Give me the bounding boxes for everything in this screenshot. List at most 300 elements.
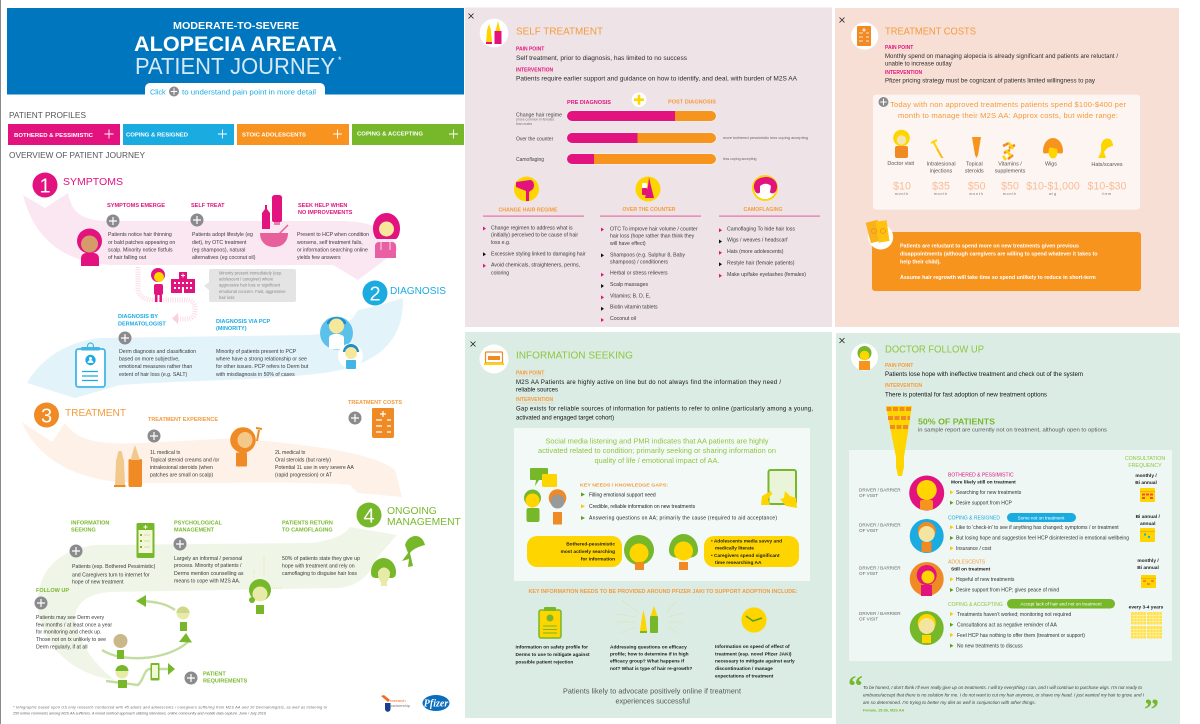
- stage 2 diagnosis: DIAGNOSIS: [390, 285, 446, 297]
- panel: information seeking: Derms to use to mitigate against: [516, 652, 590, 658]
- panel: monthly costs: [873, 95, 1140, 210]
- callout: adolescents media savvy: • Caregivers spend significant: [711, 553, 780, 559]
- column: change hair regime: Excessive styling linked to damaging hair: [491, 251, 586, 257]
- stage 1 symptoms: 1: [39, 176, 51, 198]
- icon: hospital: [171, 272, 195, 293]
- panel: monthly costs: Wigs: [1045, 162, 1057, 168]
- stage 1 symptoms: (eg shampoos), natural: [192, 248, 245, 254]
- panel: treatment costs: INTERVENTION: [885, 70, 923, 76]
- panel: social media listening: Answering questions on AA; primarily the cause (required to aid acceptance): [589, 516, 777, 522]
- stage 1 symptoms: SELF TREAT: [191, 203, 225, 209]
- panel: information seeking: necessary to mitigate against early: [715, 659, 795, 665]
- row: coping and resigned: DRIVER / BARRIER: [859, 522, 901, 528]
- row: bothered and pessimistic: DRIVER / BARRIER: [859, 488, 901, 492]
- icon: clipboard: [76, 343, 105, 387]
- column: over the counter: OTC To improve hair volume / counter: [610, 226, 698, 232]
- stage 1 symptoms: worsens, self treatment fails,: [297, 240, 363, 246]
- stage 2 diagnosis: [27, 280, 446, 398]
- stage 4 ongoing management: TO CAMOFLAGING: [282, 528, 333, 534]
- bar chart: pre and post diagnosis: Camoflaging: [516, 157, 544, 163]
- icon: speed clock: [741, 607, 767, 633]
- stage 4 ongoing management: means to cope with M2S AA.: [174, 579, 240, 585]
- stage 1 symptoms: or bald patches appearing on: [108, 240, 175, 246]
- row: bothered and pessimistic: BOTHERED & PESSIMISTIC: [948, 472, 1014, 478]
- callout: adolescents media savvy: medically literate: [715, 546, 754, 552]
- callout: adolescents media savvy: • Adolescents media savvy and: [711, 538, 782, 544]
- stage 3 treatment: 1L medical tx: [150, 450, 181, 456]
- panel: treatment costs: Pfizer pricing strategy must be cognizant of patients limited willingness to pay: [885, 79, 1095, 85]
- quote: am so determined. I’m trying to better my diet as well in conjunction with other things.: [863, 700, 1036, 705]
- icon: headscarf: [402, 536, 425, 567]
- icon: head with patch and syringe: [230, 427, 262, 466]
- panel: social media listening: Credible, reliable information on new treatments: [589, 504, 696, 510]
- icon: phone: [136, 523, 154, 558]
- stage 1 symptoms: SYMPTOMS EMERGE: [107, 203, 165, 209]
- stage 4 ongoing management: Derms mention counselling as: [174, 571, 244, 577]
- stage 3 treatment: (rapid progression) or AT: [275, 473, 333, 479]
- header banner: PATIENT JOURNEY: [135, 53, 335, 79]
- icon: doctor: [373, 213, 400, 258]
- callout: adolescents media savvy: time researching AA: [715, 560, 762, 566]
- stage 2 diagnosis: extent of hair loss (e.g. SALT): [119, 372, 188, 378]
- patient profile buttons: STOIC ADOLESCENTS: [242, 132, 306, 138]
- stage 3 treatment: Topical steroid creams and /or: [150, 458, 219, 464]
- stage 2 diagnosis: for other issues. PCP refers to Derm but: [216, 364, 309, 370]
- icon: woman with hair loss: [77, 228, 102, 266]
- callout: bothered-pessimistic: for information: [581, 556, 615, 562]
- stage 3 treatment: Oral steroids (but rarely): [275, 458, 331, 464]
- panel: monthly costs: month: [895, 192, 909, 196]
- callout: reluctance to spend: disappointments (although caregivers are willing to spend whatever it takes to: [900, 251, 1098, 257]
- stage 4 ongoing management: Patients (esp. Bothered Pessimistic): [72, 564, 156, 570]
- panel: monthly costs: month: [1003, 192, 1017, 196]
- stage 1 symptoms: SEEK HELP WHEN: [298, 203, 347, 209]
- panel: doctor follow up: PAIN POINT: [885, 363, 913, 369]
- stage 3 treatment: [22, 400, 402, 497]
- column: camoflaging: [719, 175, 820, 278]
- icon: girl: [151, 268, 165, 302]
- icon: tube and bottle: [486, 21, 502, 44]
- row: coping and resigned: [859, 513, 1160, 553]
- column: change hair regime: [483, 176, 586, 276]
- panel: self treatment: Patients require earlier support and guidance on how to identify, and deal, with burden of M2S AA: [516, 76, 797, 82]
- panel: treatment costs: [835, 8, 1179, 327]
- stage 4 ongoing management: hope with treatment and rely on: [282, 564, 355, 570]
- panel: information seeking: expectations of treatment: [715, 673, 774, 679]
- row: coping and accepting: every 3-4 years: [1129, 604, 1164, 610]
- panel: treatment costs: PAIN POINT: [885, 45, 913, 51]
- icon: small phone: [150, 663, 160, 680]
- column: camoflaging: Hats (more adolescents): [727, 249, 784, 255]
- row: coping and accepting: DRIVER / BARRIER: [859, 611, 901, 616]
- column: over the counter: [600, 176, 701, 322]
- panel: social media listening: [514, 428, 810, 581]
- icon: bottles and bowl: [260, 195, 288, 247]
- row: adolescents: DRIVER / BARRIER: [859, 566, 901, 570]
- row: coping and accepting: Accept lack of hair and not on treatment: [1020, 602, 1102, 606]
- stage 4 ongoing management: SEEKING: [71, 528, 96, 534]
- stage 2 diagnosis: DIAGNOSIS BY: [118, 314, 158, 320]
- bar chart: pre and post diagnosis: less coping accepting: [723, 157, 757, 161]
- panel: information seeking: efficacy group? What happens if: [610, 659, 684, 665]
- icon: hat: [1098, 138, 1113, 158]
- row: coping and resigned: Some not on treatment: [1018, 515, 1065, 520]
- stage 1 symptoms: diet), try OTC treatment: [192, 240, 247, 246]
- panel: monthly costs: Today with non approved treatments patients spend $100-$400 per: [890, 100, 1126, 109]
- cycle arrows: [102, 595, 192, 685]
- callout: minority present immediately: emotional concern. Fast, aggressive: [219, 289, 286, 294]
- callout: minority present immediately: adolescent / caregiver) where: [219, 276, 274, 282]
- icon: cost sheet: [857, 26, 871, 46]
- heading: patient profiles: PATIENT PROFILES: [9, 111, 86, 120]
- panel: social media listening: quality of life / emotional impact of AA.: [595, 456, 719, 465]
- panel: monthly costs: month to manage their M2S AA: Approx costs, but wide range:: [898, 111, 1118, 120]
- stage 2 diagnosis: DERMATOLOGIST: [118, 322, 166, 328]
- panel: monthly costs: Topical: [966, 162, 983, 168]
- icon: doctor visit: [893, 130, 910, 158]
- bar chart: pre and post diagnosis: Change hair regime: [516, 112, 562, 118]
- logos: partnership: [390, 703, 411, 708]
- stage 1 symptoms: Patients notice hair thinning: [108, 232, 172, 238]
- stage 1 symptoms: Present to HCP when condition: [297, 232, 369, 238]
- icon: cost sheet: [372, 408, 394, 438]
- stage 2 diagnosis: Derm diagnosis and classification: [119, 349, 196, 355]
- stage 3 treatment: TREATMENT EXPERIENCE: [148, 417, 218, 423]
- quote: embrace/accept that there is no solution for me. I do not want to cut my hair anymore, or shave my head. I just wanted my hair to grow, and I: [863, 692, 1145, 698]
- column: change hair regime: CHANGE HAIR REGIME: [498, 208, 558, 214]
- panel: self treatment: Self treatment, prior to diagnosis, has limited to no success: [516, 56, 687, 62]
- panel: information seeking: [465, 332, 832, 718]
- row: adolescents: monthly /: [1137, 558, 1159, 564]
- stage 1 symptoms: of hair falling out: [108, 255, 147, 261]
- stage 4 ongoing management: process. Minority of patients /: [174, 563, 242, 569]
- icon: hairbrush tube: [886, 406, 912, 476]
- stage 1 symptoms: or information searching online: [297, 248, 368, 254]
- stage 4 ongoing management: 50% of patients state they give up: [282, 556, 360, 562]
- panel: information seeking: Addressing questions on efficacy: [610, 644, 687, 650]
- stage 1 symptoms: scalp. Minority notice fistfuls: [108, 248, 173, 254]
- stage 4 ongoing management: for monitoring and check up.: [36, 630, 101, 636]
- row: bothered and pessimistic: More likely still on treatment: [951, 480, 1016, 486]
- stage 2 diagnosis: where have a strong relationship or see: [216, 357, 307, 363]
- stage 4 ongoing management: hope of new treatment: [72, 580, 124, 586]
- stage 2 diagnosis: DIAGNOSIS VIA PCP: [216, 319, 271, 325]
- header banner: [7, 8, 464, 96]
- stage 4 ongoing management: MANAGEMENT: [174, 528, 215, 534]
- stage 4 ongoing management: 4: [363, 506, 375, 528]
- panel: information seeking: discontinuation / manage: [715, 666, 773, 672]
- row: adolescents: Still on treatment: [951, 566, 991, 572]
- panel: information seeking: profile; how to determine if in high: [610, 652, 689, 658]
- panel: monthly costs: $50: [1001, 180, 1019, 192]
- callout: minority present immediately: hair loss: [219, 295, 234, 300]
- row: adolescents: Hopeful of new treatments: [956, 577, 1015, 583]
- stage 1 symptoms: [23, 172, 400, 280]
- logos: [381, 695, 450, 712]
- stage 3 treatment: intralesional steroids (when: [150, 465, 213, 471]
- column: over the counter: OVER THE COUNTER: [622, 207, 676, 213]
- logos: Pfizer: [424, 698, 448, 710]
- row: coping and accepting: COPING & ACCEPTING: [948, 602, 1003, 608]
- row: adolescents: Bi annual: [1137, 565, 1159, 571]
- callout: reluctance to spend: help their child).: [900, 259, 941, 265]
- row: coping and accepting: Feel HCP has nothing to offer them (treatment or support): [957, 633, 1085, 639]
- patient profile buttons: COPING & RESIGNED: [126, 132, 188, 138]
- stage 2 diagnosis: 2: [369, 284, 381, 306]
- quote: “: [848, 670, 863, 703]
- panel: treatment costs: TREATMENT COSTS: [885, 26, 976, 38]
- icon: laptop: [484, 352, 504, 365]
- panel: information seeking: INFORMATION SEEKING: [516, 350, 633, 362]
- row: bothered and pessimistic: OF VISIT: [859, 493, 878, 498]
- column: over the counter: Shampoos (e.g. Sulphur 8, Baby: [610, 252, 685, 258]
- logos: research: [390, 698, 406, 703]
- footnote: 250 online comments among M2S AA sufferers. A mixed method approach utilizing interviews, online community and mobile data capture. June / July 2019: [12, 712, 266, 716]
- callout: minority present immediately: aggressive hair loss or significant: [219, 283, 281, 288]
- icon: injection: [931, 140, 943, 158]
- panel: monthly costs: $50: [968, 180, 986, 192]
- panel: social media listening: activated related to condition; primarily seeking or sharing information on: [538, 446, 776, 455]
- panel: information seeking: Gap exists for reliable sources of information for patients to refer to online (particularly among a young,: [516, 406, 813, 412]
- icon: adolescent patient: [669, 534, 698, 570]
- icon: steroid tube: [972, 137, 981, 158]
- panel: monthly costs: Hats/scarves: [1091, 162, 1123, 168]
- stage 2 diagnosis: based on more subjective,: [119, 357, 180, 363]
- stage 2 diagnosis: Minority of patients present to PCP: [216, 349, 297, 355]
- stage 3 treatment: 3: [41, 406, 52, 428]
- panel: patient types: in sample report are currently not on treatment, although open to options: [918, 428, 1107, 434]
- row: bothered and pessimistic: Desire support from HCP: [956, 500, 1013, 506]
- quote: Female, 25-36, M2S AA: [863, 708, 904, 712]
- row: adolescents: [859, 558, 1159, 596]
- stage 3 treatment: TREATMENT COSTS: [348, 400, 402, 406]
- icon: wig: [371, 558, 396, 586]
- row: bothered and pessimistic: Searching for new treatments: [956, 490, 1022, 496]
- stage 4 ongoing management: PATIENTS RETURN: [282, 520, 333, 526]
- panel: self treatment: PAIN POINT: [516, 46, 544, 52]
- stage 4 ongoing management: REQUIREMENTS: [203, 678, 248, 684]
- heading: overview of patient journey: OVERVIEW OF PATIENT JOURNEY: [9, 151, 146, 160]
- panel: information seeking: M2S AA Patients are highly active on line but do not always find the information they need /: [516, 380, 781, 386]
- row: coping and resigned: annual: [1140, 521, 1155, 527]
- panel: information seeking: Information on speed of effect of: [715, 644, 790, 650]
- stage 4 ongoing management: Those not on tx unlikely to see: [36, 637, 106, 643]
- stage 1 symptoms: alternatives (eg coconut oil): [192, 255, 256, 261]
- column: over the counter: shampoos) / conditioners: [610, 259, 668, 265]
- patient profile buttons: [8, 124, 464, 145]
- stage 1 symptoms: NO IMPROVEMENTS: [298, 210, 353, 216]
- stage 3 treatment: Potential 1L use in very severe AA: [275, 465, 354, 471]
- panel: information seeking: experiences successful: [616, 696, 690, 706]
- panel: information seeking: treatment (esp. novel Pfizer JAKi): [715, 651, 792, 657]
- footnote: * Infographic based upon US only research conducted with 45 adults and adolescents / caregivers suffering from M2S AA and 10 Dermatologists, as well as listening to: [13, 706, 327, 710]
- icon: plus: [632, 92, 646, 107]
- row: adolescents: ADOLESCENTS: [948, 560, 986, 566]
- stage 4 ongoing management: PSYCHOLOGICAL: [174, 520, 223, 526]
- stage 3 treatment: patches are small on scalp): [150, 473, 213, 479]
- header banner: MODERATE-TO-SEVERE: [173, 21, 299, 32]
- panel: monthly costs: supplements: [995, 168, 1026, 174]
- panel: information seeking: possible patient rejection: [516, 659, 573, 665]
- row: coping and resigned: COPING & RESIGNED: [948, 516, 1000, 522]
- panel: doctor follow up: There is potential for fast adoption of new treatment options: [885, 392, 1047, 398]
- header banner: Click: [150, 88, 166, 96]
- panel: information seeking: INTERVENTION: [516, 397, 554, 403]
- column: change hair regime: Change regimen to address what is: [491, 226, 573, 232]
- panel: patient types: 50% OF PATIENTS: [918, 416, 995, 426]
- row: coping and accepting: [859, 599, 1164, 650]
- callout: bothered-pessimistic: [527, 536, 622, 567]
- panel: patient types: CONSULTATION: [1125, 456, 1165, 462]
- patient profile buttons: COPING & ACCEPTING: [357, 132, 423, 138]
- icon: patients in cycle: [114, 606, 190, 688]
- row: adolescents: OF VISIT: [859, 571, 878, 576]
- column: over the counter: Scalp massages: [610, 282, 648, 288]
- panel: monthly costs: Doctor visit: [887, 161, 915, 167]
- panel: social media listening: Filling emotional support need: [589, 492, 656, 498]
- row: coping and accepting: OF VISIT: [859, 616, 878, 622]
- column: change hair regime: loss e.g.: [491, 240, 510, 246]
- stage 1 symptoms: Patients adopt lifestyle (eg: [192, 232, 253, 238]
- bar chart: pre and post diagnosis: [516, 110, 808, 164]
- header banner: to understand pain point in more detail: [182, 88, 316, 96]
- column: over the counter: Herbal or stress relievers: [610, 271, 668, 277]
- row: bothered and pessimistic: Bi annual: [1135, 480, 1157, 486]
- referral path with hospital: [138, 267, 296, 324]
- panel: patient types: [849, 406, 1172, 661]
- bar chart: pre and post diagnosis: than males: [516, 122, 532, 126]
- panel: monthly costs: $10-$30: [1088, 180, 1127, 192]
- stage 4 ongoing management: PATIENT: [203, 672, 226, 678]
- stage 4 ongoing management: Largely an informal / personal: [174, 556, 242, 562]
- icon: safety clipboard: [539, 607, 561, 638]
- stage 4 ongoing management: few months / at least once a year: [36, 622, 112, 628]
- row: coping and accepting: No new treatments to discuss: [957, 644, 1023, 650]
- stage 4 ongoing management: camoflaging to disguise hair loss: [282, 571, 357, 577]
- panel: self treatment: INTERVENTION: [516, 67, 554, 73]
- row: coping and accepting: Consultations act as negative reminder of AA: [957, 622, 1057, 628]
- callout: minority present immediately: [204, 269, 296, 302]
- stage 3 treatment: TREATMENT: [65, 408, 126, 419]
- row: coping and accepting: Treatments haven’t worked; monitoring not required: [957, 612, 1072, 618]
- panel: monthly costs: Intralesional: [926, 162, 956, 168]
- column: over the counter: Biotin vitamin tablets: [610, 305, 658, 311]
- row: bothered and pessimistic: [859, 472, 1157, 510]
- panel: treatment costs: unable to increase outlay: [885, 62, 952, 68]
- column: over the counter: Vitamins; B, D, E,: [610, 293, 651, 299]
- icon: green-haired patient: [624, 535, 654, 570]
- panel: information seeking: KEY INFORMATION NEEDS TO BE PROVIDED AROUND PFIZER JAKI TO SUPPORT ADOPTION INCLUDE:: [528, 589, 798, 595]
- callout: bothered-pessimistic: Bothered-pessimistic: [566, 542, 615, 548]
- stage 2 diagnosis: (MINORITY): [216, 326, 247, 332]
- panel: monthly costs: $10: [893, 180, 911, 192]
- stage 4 ongoing management: INFORMATION: [71, 520, 109, 526]
- panel: monthly costs: wig: [1049, 192, 1057, 196]
- panel: treatment costs: Monthly spend on managing alopecia is already significant and patients are reluctant /: [885, 54, 1118, 60]
- stage 1 symptoms: yields few answers: [297, 255, 341, 261]
- panel: doctor follow up: DOCTOR FOLLOW UP: [885, 344, 984, 356]
- row: coping and resigned: Bi annual /: [1136, 514, 1160, 520]
- panel: self treatment: PRE DIAGNOSIS: [567, 100, 611, 106]
- panel: monthly costs: steroids: [965, 168, 984, 174]
- panel: monthly costs: Vitamins /: [998, 162, 1022, 168]
- callout: reluctance to spend: [866, 220, 1141, 291]
- row: adolescents: Desire support from HCP; gives peace of mind: [956, 588, 1059, 594]
- icon: patient: [858, 346, 872, 370]
- column: over the counter: Coconut oil: [610, 316, 636, 322]
- patient profile buttons: BOTHERED & PESSIMISTIC: [14, 133, 93, 139]
- panel: self treatment: POST DIAGNOSIS: [668, 100, 716, 106]
- callout: bothered-pessimistic: most actively searching: [561, 549, 615, 555]
- icon: vitamins: [1003, 143, 1015, 160]
- panel: doctor follow up: Patients lose hope with ineffective treatment and check out of the system: [885, 372, 1083, 378]
- column: camoflaging: Make up/fake eyelashes (females): [727, 272, 806, 278]
- panel: information seeking: Information on safety profile for: [516, 645, 588, 651]
- header banner: *: [338, 55, 342, 65]
- stage 4 ongoing management: MANAGEMENT: [387, 517, 462, 528]
- stage 4 ongoing management: Derm regularly, if at all: [36, 645, 88, 651]
- panel: social media listening: KEY NEEDS / KNOWLEDGE GAPS:: [580, 483, 668, 489]
- column: change hair regime: Avoid chemicals, straighteners, perms,: [491, 263, 580, 269]
- column: camoflaging: CAMOFLAGING: [744, 207, 783, 213]
- panel: monthly costs: injections: [930, 168, 953, 174]
- panel: information seeking: PAIN POINT: [516, 370, 544, 376]
- panel: doctor follow up: INTERVENTION: [885, 383, 923, 389]
- panel: monthly costs: $10-$1,000: [1026, 180, 1080, 192]
- stage 4 ongoing management: Patients may see Derm every: [36, 615, 104, 621]
- stage 4 ongoing management: [34, 502, 462, 688]
- icon: wig: [1043, 138, 1063, 158]
- quote: [848, 670, 1159, 724]
- bar chart: pre and post diagnosis: Over the counter: [516, 136, 554, 142]
- stage 4 ongoing management: ONGOING: [387, 506, 437, 517]
- column: change hair regime: coloring: [491, 270, 509, 276]
- row: coping and resigned: But losing hope and suggestion feel HCP disinterested in emotional wellbeing: [956, 536, 1129, 542]
- panel: self treatment: [465, 8, 832, 327]
- panel: information seeking: reliable sources: [516, 388, 558, 394]
- icon: doctor and patient: [320, 316, 363, 369]
- stage 4 ongoing management: FOLLOW UP: [36, 588, 69, 594]
- panel: monthly costs: month: [934, 192, 948, 196]
- panel: monthly costs: $35: [932, 180, 950, 192]
- row: coping and resigned: Like to ‘check-in’ to see if anything has changed; symptoms / or treatment: [956, 525, 1119, 531]
- callout: minority present immediately: Minority present immediately (esp.: [219, 270, 282, 276]
- panel: information seeking: not? What is type of hair re-growth?: [610, 666, 692, 672]
- callout: reluctance to spend: Assume hair regrowth will take time so spend unlikely to reduce in short-term: [900, 275, 1096, 281]
- icon: tube and bottle with rays: [616, 600, 684, 633]
- quote: To be honest, I don’t think I’ll ever really give up on treatments. I will try everything I can, and I will continue to purchase wigs. I’m not ready to: [863, 685, 1142, 690]
- stage 1 symptoms: SYMPTOMS: [63, 177, 123, 188]
- stage 3 treatment: 2L medical tx: [275, 450, 306, 456]
- row: coping and resigned: Insurance / cost: [956, 546, 992, 552]
- panel: monthly costs: month: [969, 192, 984, 196]
- column: over the counter: will have effect): [610, 241, 646, 247]
- icon: tube and bottle: [114, 445, 142, 487]
- row: bothered and pessimistic: monthly /: [1135, 473, 1157, 479]
- panel: doctor follow up: [836, 333, 1180, 724]
- stage 4 ongoing management: and Caregivers turn to internet for: [72, 572, 150, 578]
- column: over the counter: hair loss (hope rather than think they: [610, 234, 695, 240]
- panel: social media listening: Social media listening and PMR indicates that AA patients are highly: [546, 436, 769, 446]
- column: camoflaging: Wigs / weaves / headscarf: [727, 238, 788, 244]
- panel: self treatment: SELF TREATMENT: [516, 26, 604, 38]
- column: change hair regime: (initially) perceived to be cause of hair: [491, 233, 578, 239]
- callout: adolescents media savvy: [704, 536, 799, 567]
- callout: reluctance to spend: Patients are reluctant to spend more on new treatments given previous: [900, 244, 1079, 250]
- column: camoflaging: Camoflaging To hide hair loss: [727, 226, 795, 232]
- panel: information seeking: activated and engaged target cohort): [516, 415, 614, 421]
- icon: speech bubbles with two people: [524, 468, 566, 524]
